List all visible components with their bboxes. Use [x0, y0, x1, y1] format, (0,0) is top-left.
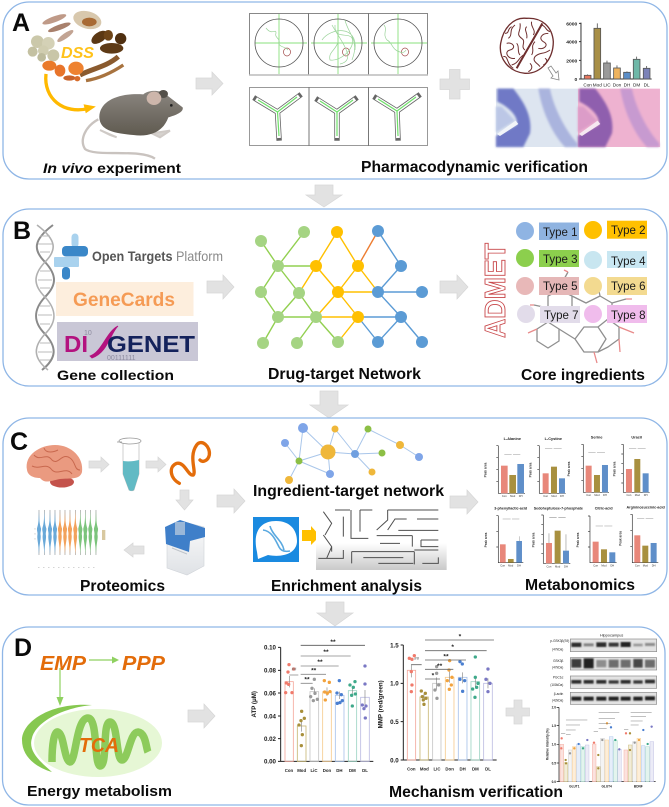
histology: HE stain	[578, 89, 660, 147]
chart: MMP: ##	[414, 656, 420, 661]
logo: GeneCards	[56, 282, 194, 316]
chart: MMP: MMP (red/green)	[378, 680, 385, 728]
legend: ingredient types: Type 4	[611, 256, 646, 268]
legend: ingredient types: Type 2	[611, 225, 646, 237]
chart: Sedoheptulose-7-phosphate: Sedoheptulose-7-phosphate	[534, 507, 583, 511]
icon: mouse	[83, 90, 183, 159]
chart: Uracil: DH	[644, 493, 648, 497]
chart: Uracil: Mod	[635, 493, 640, 497]
western blots: PGC1α	[553, 676, 563, 680]
chart: 3-phenyllactic-acid: Peak area	[484, 532, 488, 547]
western blots: (47kDa)	[552, 665, 563, 669]
chart: protein intensity	[546, 706, 656, 788]
icon: open arrow	[548, 66, 559, 80]
chart: Sedoheptulose-7-phosphate: Peak area	[531, 532, 535, 547]
maze diagram	[316, 510, 447, 570]
chart: Sedoheptulose-7-phosphate: Con	[547, 564, 552, 568]
drug-target network	[255, 225, 428, 349]
chart: L-Cystine: Peak area	[529, 462, 533, 477]
chart: Uracil: Peak area	[613, 461, 617, 476]
arrow	[188, 704, 215, 728]
chart: Argininosuccinic-acid: Peak area	[619, 531, 623, 546]
chart: L-Cystine: Con	[543, 494, 549, 498]
chart: ATP: DH	[336, 768, 342, 773]
chart: L-Alanine: Peak area	[483, 462, 487, 477]
arrow B to C	[310, 391, 348, 418]
arrow: herbs to mouse	[46, 74, 95, 113]
bar chart: brain measure: 4000	[566, 40, 578, 46]
caption: proteomics: Proteomics	[80, 578, 165, 595]
chart: Sedoheptulose-7-phosphate: Mod	[555, 564, 561, 568]
chart: Uracil: Con	[627, 493, 632, 497]
bar chart: brain measure: DH	[624, 83, 630, 88]
letter D: D	[14, 634, 32, 662]
arrow: yellow	[302, 526, 320, 545]
chart: protein intensity: 1.0	[552, 743, 556, 747]
legend: ingredient types: Type 5	[543, 281, 578, 293]
chart: MMP: 0.5	[390, 719, 399, 726]
chart: L-Cystine: DH	[560, 494, 564, 498]
arrow	[176, 490, 193, 510]
chart: Serine: Serine	[591, 436, 602, 440]
letter C: C	[10, 428, 28, 456]
panel B: network pharmacology	[3, 209, 667, 386]
chart: ATP: **	[323, 649, 329, 656]
chart: protein intensity: Relative intensity (%)	[546, 728, 550, 760]
bar chart: brain measure: Don	[613, 83, 622, 88]
panel C: omics	[3, 418, 667, 595]
chart: ATP: **	[311, 667, 317, 674]
caption: energy metabolism: Energy metabolism	[27, 783, 172, 800]
histology: blue stain	[496, 89, 578, 147]
legend: ingredient types	[516, 221, 647, 323]
logo: GeneCards: GeneCards	[73, 289, 175, 311]
chart: ATP: **	[330, 639, 336, 646]
caption: pharmacodynamic verification: Pharmacodynamic verification	[361, 159, 588, 176]
chart: protein intensity: GLUT4	[601, 784, 612, 788]
caption: enrichment analysis: Enrichment analysis	[271, 578, 422, 595]
western blots	[550, 633, 657, 704]
chart: 3-phenyllactic-acid: Con	[500, 564, 506, 568]
bar chart: brain measure: LIC	[603, 83, 611, 88]
chart: L-Alanine: Mod	[510, 494, 516, 498]
caption: mechanism verification: Mechanism verification	[389, 784, 563, 801]
chart: ATP: 0.08	[264, 668, 277, 675]
violin plots	[35, 510, 105, 568]
letter A: A	[12, 9, 30, 37]
caption: gene collection: Gene collection	[57, 367, 174, 383]
logo: Open Targets: Open Targets Platform	[92, 248, 223, 264]
chart: 3-phenyllactic-acid: Mod	[508, 564, 514, 568]
bar chart: brain measure: DM	[633, 83, 640, 88]
logo: DisGeNET: 10	[84, 330, 92, 337]
arrow	[146, 457, 166, 472]
chart: MMP: **	[443, 653, 449, 660]
chart: Serine: Mod	[594, 493, 600, 497]
chart: Serine: DH	[603, 493, 607, 497]
label: PPP: PPP	[122, 653, 166, 675]
chart: MMP: Con	[407, 766, 416, 771]
chart: ATP: ##	[292, 666, 297, 671]
chart: ATP: DL	[362, 768, 368, 773]
plus sign	[440, 70, 470, 99]
ADMET vertical label: ADMET	[480, 243, 512, 338]
chart: MMP: Don	[445, 766, 454, 771]
chart: MMP: **	[437, 663, 443, 670]
chart: 3-phenyllactic-acid: 3-phenyllactic-acid	[494, 507, 527, 511]
chart: MMP: *	[432, 672, 435, 679]
chart: 3-phenyllactic-acid	[484, 507, 527, 568]
label: TCA: TCA	[79, 735, 119, 757]
chart: protein intensity: 2.0	[552, 706, 556, 710]
logo: Open Targets	[54, 234, 223, 280]
chart: 3-phenyllactic-acid: DH	[517, 564, 521, 568]
caption: in vivo experiment: In vivo experiment	[43, 160, 181, 176]
chart: Sedoheptulose-7-phosphate: DH	[564, 564, 568, 568]
arrow	[450, 490, 478, 514]
chart: MMP	[378, 634, 497, 771]
chart: L-Alanine: L-Alanine	[504, 437, 521, 441]
icon: sample tube	[117, 438, 141, 491]
chart: ATP: 0.06	[264, 690, 277, 697]
chart: Argininosuccinic-acid: DH	[652, 564, 656, 568]
letter B: B	[13, 217, 31, 245]
chart: protein intensity: GLUT1	[569, 784, 580, 788]
chart: ATP	[251, 639, 373, 773]
chart: Uracil: Uracil	[631, 436, 642, 440]
molecule structure	[528, 270, 634, 363]
chart: ATP: 0.04	[264, 713, 277, 720]
western blots: (42kDa)	[552, 698, 563, 702]
icon: brain sketch	[500, 18, 553, 73]
logo: DisGeNET: 00111111	[107, 355, 136, 362]
chart: MMP: *	[459, 634, 462, 641]
Y-maze panels	[250, 87, 428, 146]
water maze panels	[249, 13, 428, 75]
chart: Sedoheptulose-7-phosphate	[531, 507, 583, 568]
caption: drug-target network: Drug-target Network	[268, 366, 421, 383]
chart: MMP: DL	[485, 766, 491, 771]
arrow	[124, 543, 144, 557]
chart: Argininosuccinic-acid: Argininosuccinic-acid	[627, 505, 665, 509]
chart: Citric-acid	[576, 507, 617, 568]
plus sign	[506, 700, 530, 724]
chart: Argininosuccinic-acid: Mod	[643, 564, 648, 568]
chart: Citric-acid: Mod	[601, 564, 607, 568]
chart: MMP: LiC	[433, 766, 440, 771]
arrow A to B	[306, 185, 342, 207]
chart: Citric-acid: DH	[610, 564, 614, 568]
western blots: (100kDa)	[550, 683, 563, 687]
ingredient-target network	[281, 423, 423, 484]
chart: MMP: 1.0	[390, 681, 399, 688]
arrow	[196, 72, 223, 95]
chart: ATP: Mod	[297, 768, 306, 773]
legend: ingredient types: Type 7	[544, 310, 579, 322]
icon: brain	[27, 445, 82, 488]
chart: ATP: **	[304, 676, 310, 683]
label: DSS: DSS	[61, 45, 95, 62]
logo: DisGeNET	[57, 322, 198, 362]
arrow: EMP to TCA	[56, 668, 64, 706]
chart: ATP: DM	[349, 768, 356, 773]
chart: Citric-acid: Citric-acid	[595, 507, 613, 511]
chart: ATP: LiC	[311, 768, 317, 773]
chart: Uracil	[613, 436, 650, 497]
western blots: β-actin	[554, 692, 564, 696]
western blots: GSK3β	[553, 659, 563, 663]
logo: DisGeNET: DI	[64, 331, 88, 357]
chart: ATP: 0.00	[264, 759, 277, 766]
caption: ingredient-target network: Ingredient-target network	[253, 483, 444, 500]
arrow	[217, 489, 245, 513]
western blots: p-GSK3β(S9)	[550, 639, 569, 643]
arrow	[440, 275, 468, 299]
legend: ingredient types: Type 8	[611, 310, 646, 322]
legend: ingredient types: Type 3	[543, 254, 578, 266]
icon: mass spectrometer	[165, 520, 205, 575]
chart: L-Alanine	[483, 437, 525, 498]
chart: protein intensity: 1.5	[552, 724, 556, 728]
legend: ingredient types: Type 6	[611, 281, 646, 293]
chart: L-Alanine: Con	[502, 494, 507, 498]
icon: DNA chat	[253, 517, 299, 562]
icon: mitochondrion	[22, 705, 162, 777]
label: EMP: EMP	[40, 653, 87, 675]
chart: Serine	[567, 436, 609, 497]
panel A: in vivo and pharmacodynamics	[3, 2, 667, 179]
chart: MMP: 0.0	[390, 757, 399, 764]
chart: Serine: Peak area	[567, 461, 571, 476]
legend: ingredient types: Type 1	[543, 227, 578, 239]
bar chart: brain measure	[566, 21, 652, 88]
chart: ATP: Con	[285, 768, 294, 773]
western blots: (47kDa)	[552, 647, 563, 651]
chart: ATP: **	[317, 659, 323, 666]
arrow: EMP to PPP	[89, 656, 119, 664]
chart: protein intensity: 0.0	[552, 780, 556, 784]
bar chart: brain measure: 6000	[566, 21, 578, 27]
arrow C to D	[317, 602, 353, 626]
chart: Serine: Con	[586, 493, 592, 497]
bar chart: brain measure: 0	[575, 77, 578, 83]
chart: MMP: DH	[460, 766, 466, 771]
chart: protein intensity: 0.5	[552, 761, 556, 765]
chart: ATP: 0.10	[264, 645, 277, 652]
western blots: Hippocampus	[600, 633, 623, 637]
chart: ATP: 0.02	[264, 736, 277, 743]
chart: L-Cystine: Mod	[551, 494, 557, 498]
chart: MMP: Mod	[420, 766, 429, 771]
chart: Argininosuccinic-acid: Con	[635, 564, 640, 568]
chart: L-Cystine	[529, 437, 566, 498]
bar chart: brain measure: DL	[644, 83, 650, 88]
logo: DisGeNET: GENET	[107, 331, 195, 357]
bar chart: brain measure: 2000	[566, 58, 578, 64]
chart: Citric-acid: Con	[593, 564, 599, 568]
bar chart: brain measure: Mod	[593, 83, 602, 88]
bar chart: brain measure: Con	[583, 83, 592, 88]
icon: herbs	[28, 8, 126, 81]
icon: protein squiggle	[171, 443, 209, 483]
chart: MMP: 1.5	[390, 642, 399, 649]
chart: Citric-acid: Peak area	[576, 532, 580, 547]
caption: core ingredients: Core ingredients	[521, 367, 645, 384]
chart: L-Alanine: DH	[519, 494, 523, 498]
chart: L-Cystine: L-Cystine	[545, 437, 562, 441]
caption: metabonomics: Metabonomics	[525, 577, 635, 594]
chart: ATP: ATP (μM)	[251, 691, 258, 718]
arrow	[89, 457, 109, 472]
chart: ATP: Don	[323, 768, 332, 773]
arrow	[207, 275, 234, 299]
icon: DNA helix	[36, 225, 54, 370]
chart: MMP: DM	[472, 766, 479, 771]
chart: protein intensity: BDNF	[634, 784, 643, 788]
chart: MMP: *	[451, 644, 454, 651]
metabolite bar charts	[483, 436, 665, 568]
panel D: mechanism	[2, 627, 665, 805]
chart: Argininosuccinic-acid	[619, 505, 665, 568]
